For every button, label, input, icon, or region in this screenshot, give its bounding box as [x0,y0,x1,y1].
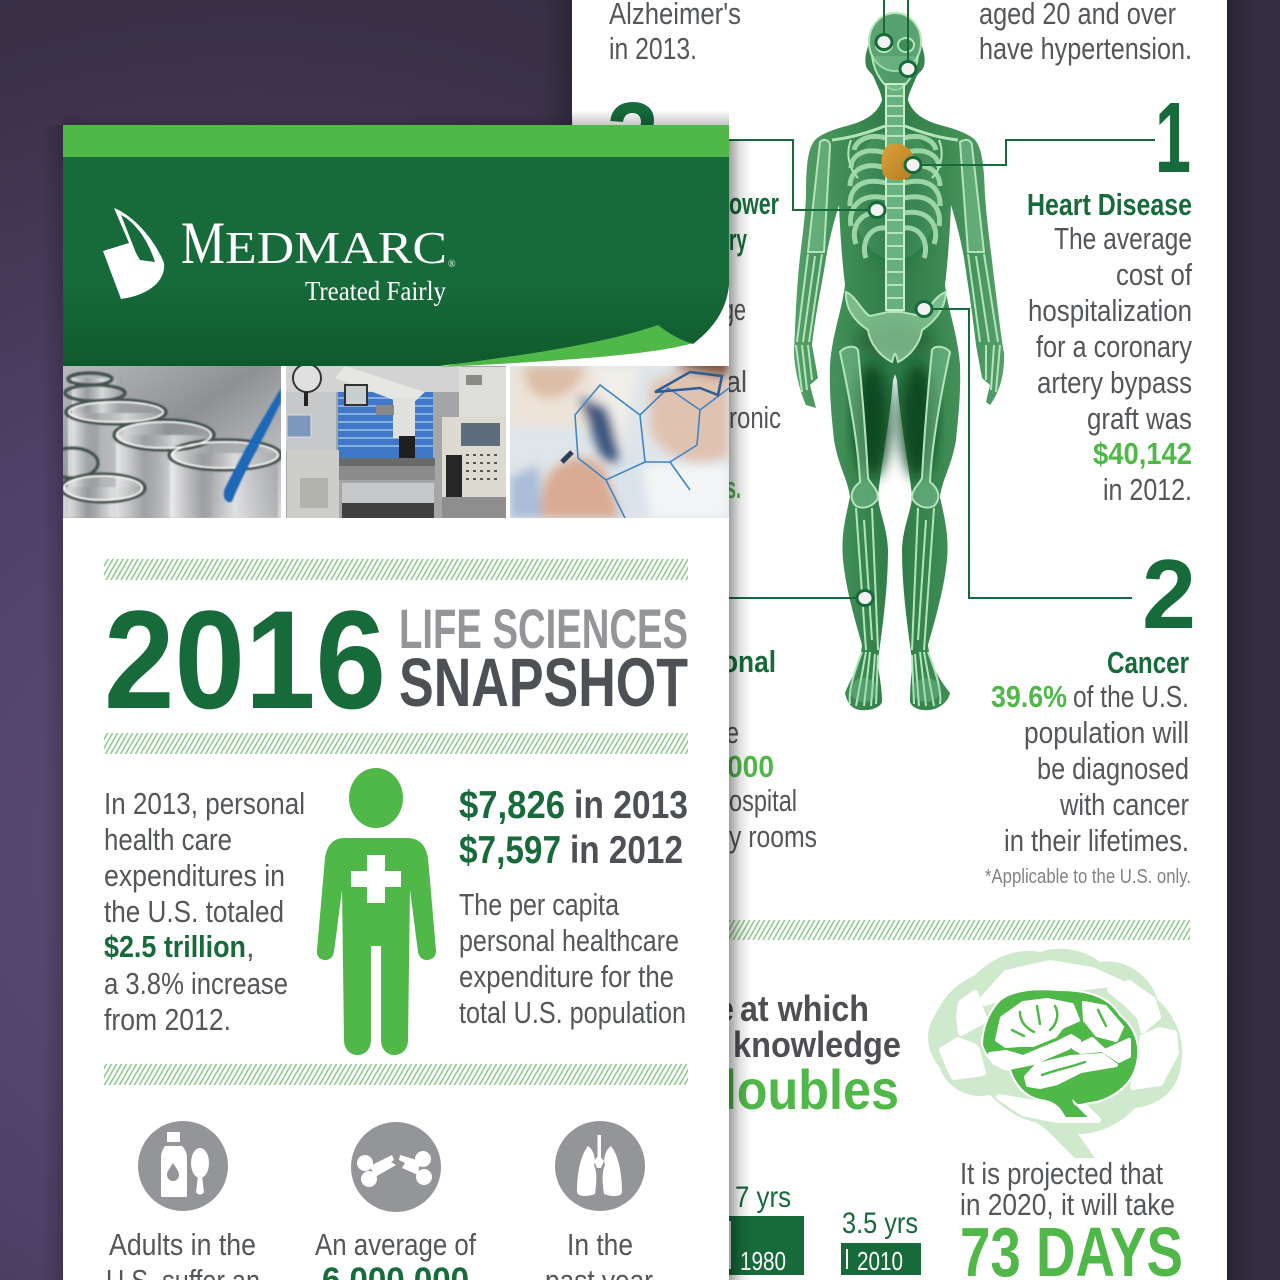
hidden left column fragments: ower [729,186,779,221]
connector lines [729,0,1155,598]
text: per capita: $7,597 [459,829,561,872]
number 3: 3 [607,82,659,194]
text: rate at which knowledge doubles [706,988,901,1121]
text: per capita: in 2013 [574,784,688,827]
hidden left column fragments: 000 [727,749,774,784]
text: cancer: 39.6% [991,679,1067,714]
logo wordmark [181,210,456,276]
text: rate at which knowledge doubles: e [716,988,734,1029]
chart: 1980 bar [729,1181,804,1276]
text: an average of: An average of [315,1227,476,1262]
photo: test tubes [46,366,281,518]
header curl highlight [440,325,693,367]
text: expenditures: $2.5 trillion [104,929,246,964]
body markers [857,34,932,606]
text: adults in the U.S.: Adults in the [109,1227,256,1262]
chart: 2010 bar [841,1207,921,1276]
text: projected 73 days: It is projected that [960,1156,1163,1191]
text: cancer: be diagnosed [1037,751,1189,786]
text: hypertension stat: have hypertension. [979,31,1192,66]
thigh shading [854,150,936,478]
text: heart disease: in 2012. [1103,472,1192,507]
front page shadow right [729,140,751,1280]
logo [103,208,456,306]
title: SNAPSHOT [399,644,688,721]
text: expenditures: In 2013, personal [104,786,305,821]
body silhouette left half [794,14,895,710]
text: hypertension stat [979,0,1192,66]
panel: front page [46,125,729,1280]
text: rate at which knowledge doubles: knowledge [733,1024,901,1065]
icon: person with cross [317,768,436,1055]
text: in the past year: In the [567,1227,633,1262]
skeleton [796,13,1000,706]
text: projected 73 days: in 2020, it will take [960,1187,1175,1222]
text: heart disease: hospitalization [1028,293,1192,328]
hidden left column fragments: ry [729,222,747,257]
text: per capita: total U.S. population [459,995,686,1030]
hidden left column fragments [722,186,817,854]
chart: 1980 bar: 7 yrs [735,1181,791,1214]
text: expenditures: a 3.8% increase [104,966,288,1001]
text: heart disease [1027,187,1192,507]
text: per capita: The per capita [459,887,620,922]
icon: lungs [555,1121,645,1211]
text: rate at which knowledge doubles: at which [740,988,869,1029]
hidden left column fragments: ospital [729,783,797,818]
text: per capita: in 2012 [570,829,683,872]
photo: scientist [510,366,729,518]
hidden left column fragments: ge [722,292,746,327]
text: heart disease: Heart Disease [1027,187,1192,222]
text: Alzheimer's stat: in 2013. [609,31,697,66]
text: cancer: Cancer [1107,645,1189,680]
body figure [794,13,1004,710]
text: projected 73 days [960,1156,1183,1280]
hidden left column fragments: onal [722,644,776,679]
header band light green [63,125,729,157]
text: cancer: with cancer [1059,787,1189,822]
number 1: 1 [1155,82,1191,194]
icon: medicine bottle and spoon [138,1121,228,1211]
chart: 2010 bar: 2010 [857,1246,903,1276]
hidden left column fragments: y rooms [729,819,817,854]
text: Alzheimer's stat [609,0,741,66]
header green panel [63,157,729,366]
text: expenditures: from 2012. [104,1002,231,1037]
text: cancer: of the U.S. [1073,679,1189,714]
text: rate at which knowledge doubles: doubles [706,1058,899,1121]
text: heart disease: The average [1054,221,1192,256]
number 2: 2 [1142,539,1196,649]
photo: medical equipment [286,364,506,518]
title: 2016 [104,581,386,738]
chart: 2010 bar: 3.5 yrs [842,1207,918,1240]
title: LIFE SCIENCES [399,597,688,660]
text: adults in the U.S. [106,1227,260,1280]
hidden left column fragments: ronic [729,400,781,435]
hidden left column fragments: s. [726,470,741,505]
logo wordmark: M [181,210,225,276]
hidden left column fragments: e [726,715,739,750]
title [104,581,688,738]
text: cancer: population will [1024,715,1189,750]
text: expenditures: the U.S. totaled [104,894,284,929]
body silhouette right half [895,14,1004,710]
logo tagline: Treated Fairly [305,276,446,306]
text: cancer: in their lifetimes. [1004,823,1189,858]
text: an average of [315,1227,476,1280]
footnote: *Applicable to the U.S. only. [985,866,1191,888]
text: expenditures [104,786,305,1037]
text: per capita: personal healthcare [459,923,679,958]
text: heart disease: cost of [1116,257,1192,292]
icon: brain [928,949,1182,1158]
chart: 1980 bar: 1980 [740,1246,786,1276]
text: heart disease: for a coronary [1036,329,1192,364]
logo wordmark: EDMARC [225,223,447,273]
text: expenditures: , [246,929,255,964]
text: in the past year [545,1227,653,1280]
text: heart disease: artery bypass [1037,365,1192,400]
panel: back page [572,0,1227,1280]
logo wordmark: ® [448,259,456,270]
hidden left column fragments: al [726,364,747,399]
text: per capita: $7,826 [459,784,565,827]
text: per capita [459,784,688,1030]
icon: broken bone [351,1122,441,1212]
text: heart disease: graft was [1087,401,1192,436]
text: heart disease: $40,142 [1093,436,1192,471]
text: expenditures: health care [104,822,232,857]
logo mark [103,208,164,299]
text: per capita: expenditure for the [459,959,674,994]
heart [881,144,914,180]
text: cancer [991,645,1189,858]
text: expenditures: expenditures in [104,858,285,893]
